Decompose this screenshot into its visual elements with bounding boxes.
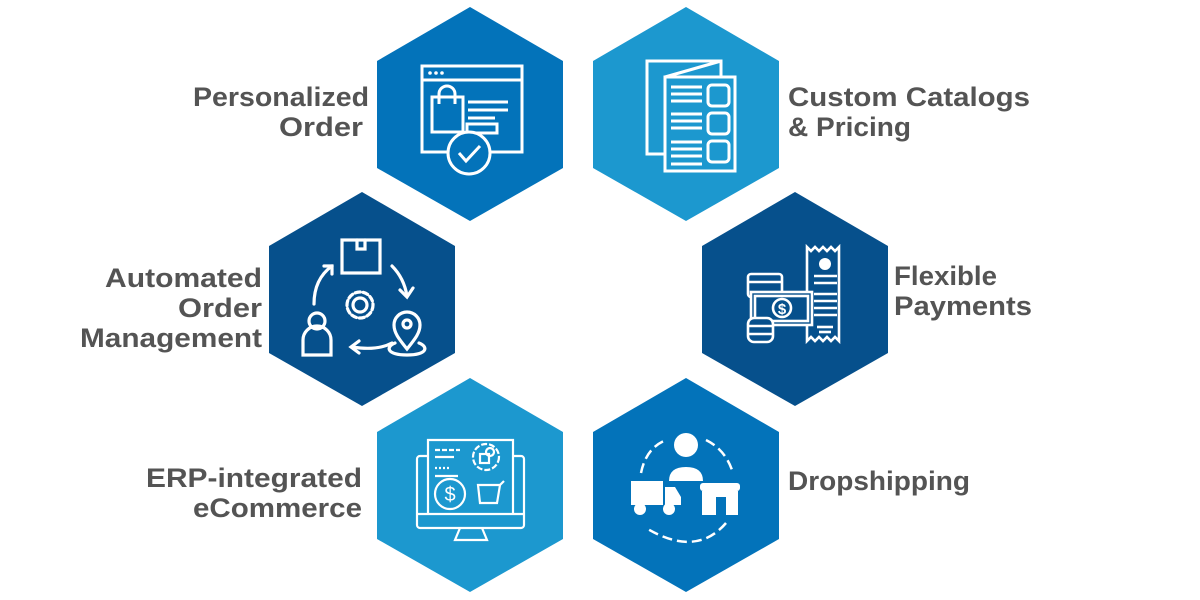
- label: automated order management: Management: [80, 323, 262, 353]
- label: dropshipping: Dropshipping: [788, 466, 970, 496]
- label: erp-integrated ecommerce: [146, 463, 362, 523]
- label: personalized order: [193, 82, 369, 142]
- label: custom catalogs & pricing: [788, 82, 1030, 142]
- label: flexible payments: Flexible: [894, 261, 997, 291]
- icon text: dollar: $: [444, 484, 456, 506]
- label: flexible payments: Payments: [894, 291, 1032, 321]
- label: custom catalogs & pricing: Custom Catalogs: [788, 82, 1030, 112]
- hex: flexible payments: [702, 192, 888, 406]
- icon: catalog pages: [647, 61, 735, 171]
- icon text: dollar: $: [778, 301, 787, 318]
- icon: dropshipping cycle: [631, 433, 740, 515]
- label: personalized order: Order: [279, 112, 364, 142]
- label: automated order management: [80, 263, 263, 353]
- label: personalized order: Personalized: [193, 82, 369, 112]
- hex: automated order management: [269, 192, 455, 406]
- label: erp-integrated ecommerce: ERP-integrated: [146, 463, 362, 493]
- label: automated order management: Automated: [105, 263, 262, 293]
- label: erp-integrated ecommerce: eCommerce: [193, 493, 362, 523]
- label: custom catalogs & pricing: & Pricing: [788, 112, 911, 142]
- icon: order cycle: [303, 240, 425, 355]
- hex: custom catalogs: [593, 7, 779, 221]
- icon: browser shopping bag with check: [422, 66, 522, 174]
- hex: erp-integrated ecommerce: [377, 378, 563, 592]
- icon: monitor with dollar cart gear: [417, 440, 524, 540]
- hex: dropshipping: [593, 378, 779, 592]
- icon: receipt card bill coins: [748, 247, 839, 342]
- label: flexible payments: [894, 261, 1032, 321]
- hex: personalized order: [377, 7, 563, 221]
- label: automated order management: Order: [178, 293, 263, 323]
